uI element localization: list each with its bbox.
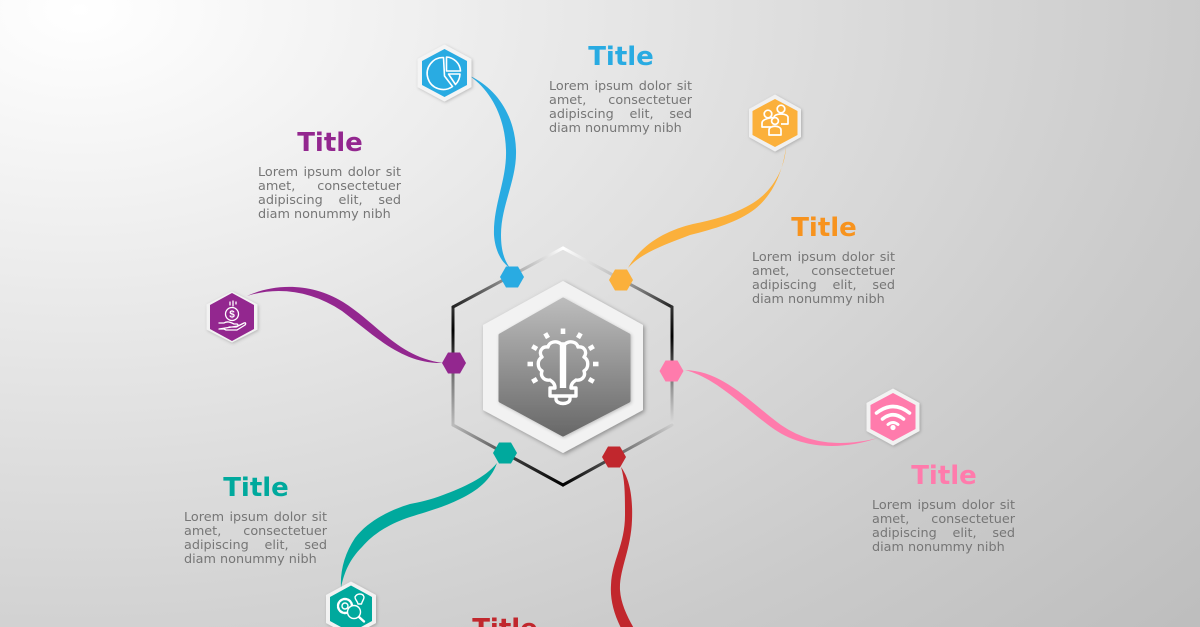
ribbon: blue connector xyxy=(470,76,516,268)
ribbon: teal connector xyxy=(341,463,497,588)
node: pink xyxy=(660,360,684,382)
text block: orange body: Lorem ipsum dolor sit amet, consectetuer adipiscing elit, sed diam nonummy nibh xyxy=(752,250,895,307)
text block: pink body: Lorem ipsum dolor sit amet, consectetuer adipiscing elit, sed diam nonummy nibh xyxy=(872,498,1015,555)
ribbon: purple connector xyxy=(247,287,443,363)
heading: pink title: Title xyxy=(911,461,977,491)
node: teal xyxy=(493,442,517,464)
ribbon: red connector xyxy=(611,467,636,627)
node: red xyxy=(602,446,626,468)
icon: brain light bulb xyxy=(528,328,598,404)
node: blue xyxy=(500,266,524,288)
dollar sign: $ xyxy=(229,310,235,320)
wifi dot xyxy=(890,425,896,430)
heading: teal title: Title xyxy=(223,473,289,503)
icon badge: purple money in hand xyxy=(206,292,258,342)
text block: purple body: Lorem ipsum dolor sit amet, consectetuer adipiscing elit, sed diam nonummy nibh xyxy=(258,165,401,222)
panel: pink item xyxy=(872,461,1015,555)
heading: orange title: Title xyxy=(791,213,857,243)
panel: blue item xyxy=(549,42,692,136)
center white hexagon xyxy=(483,281,643,453)
panel: orange item xyxy=(752,213,895,307)
center grey hexagon xyxy=(500,299,629,435)
heading: purple title: Title xyxy=(297,128,363,158)
ribbon: pink connector xyxy=(685,370,878,446)
icon badge: blue pie chart xyxy=(418,44,472,102)
heading: blue title: Title xyxy=(588,42,654,72)
panel: teal item xyxy=(184,473,327,567)
node: orange xyxy=(609,270,633,290)
icon badge: teal gear and magnifier xyxy=(326,582,376,627)
icon badge: pink wifi xyxy=(866,388,920,446)
text block: teal body: Lorem ipsum dolor sit amet, consectetuer adipiscing elit, sed diam nonummy nibh xyxy=(184,510,327,567)
text block: blue body: Lorem ipsum dolor sit amet, consectetuer adipiscing elit, sed diam nonummy nibh xyxy=(549,79,692,136)
hexagon ring xyxy=(453,248,672,485)
icon badge: orange people xyxy=(749,94,801,152)
node: purple xyxy=(442,352,466,374)
panel: purple item xyxy=(258,128,401,222)
ribbon: orange connector xyxy=(628,147,786,268)
